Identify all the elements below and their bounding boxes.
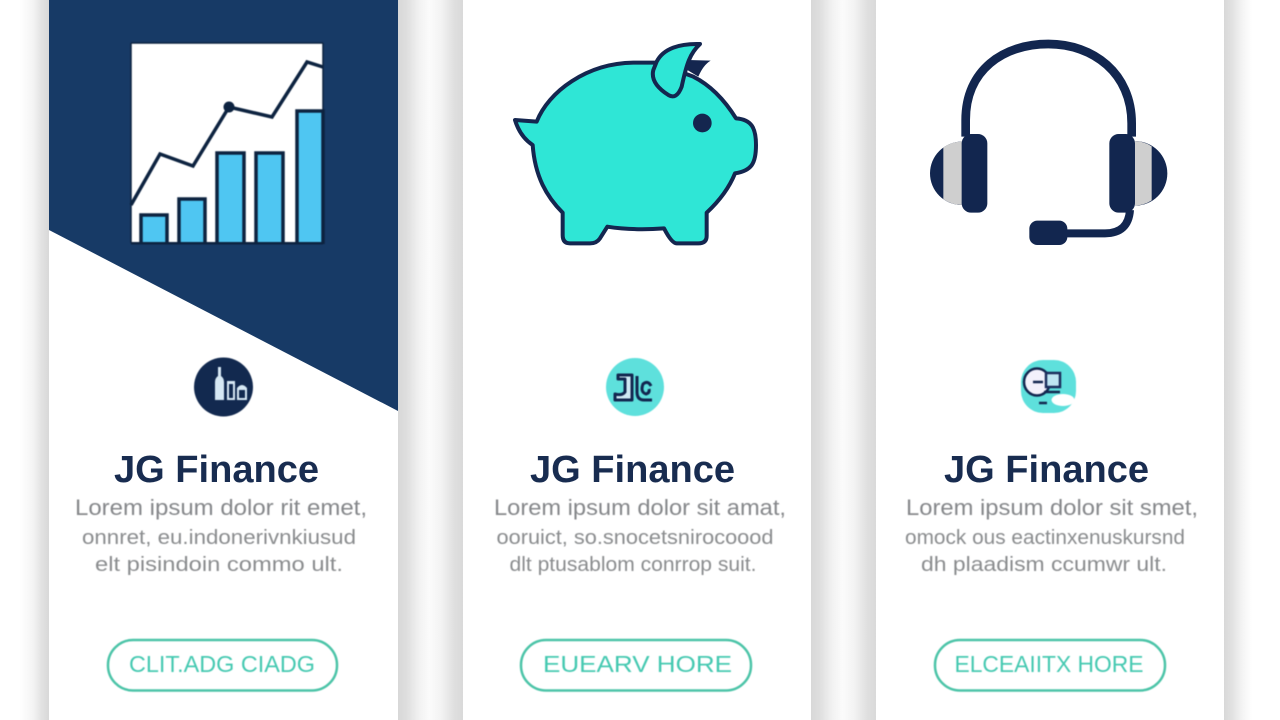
icon: piggy bank: [515, 44, 756, 243]
button: card 1: CLIT.ADG CIADG: [129, 651, 315, 677]
panel: card 3: [905, 44, 1198, 691]
description: card 2: [494, 495, 786, 576]
button: card 2: EUEARV HORE: [543, 651, 732, 677]
icon: bar and line chart: [131, 43, 323, 244]
description: card 3: dh plaadism ccumwr ult.: [921, 553, 1167, 576]
description: card 1: elt pisindoin commo ult.: [95, 553, 343, 576]
description: card 2: dlt ptusablom conrrop suit.: [510, 553, 756, 576]
icon: small teal badge: [606, 358, 664, 416]
icon: small navy chart badge: [194, 358, 253, 416]
icon: small teal headset badge: [1021, 360, 1076, 413]
description: card 1: onnret, eu.indonerivnkiusud: [82, 526, 356, 549]
description: card 3: Lorem ipsum dolor sit smet,: [906, 495, 1198, 520]
description: card 1: Lorem ipsum dolor rit emet,: [75, 495, 367, 520]
button: card 2: [521, 640, 751, 690]
description: card 2: ooruict, so.snocetsnirocoood: [496, 526, 774, 549]
heading: card 3: JG Finance: [944, 449, 1149, 491]
panel: card 1: [49, 0, 398, 690]
icon: headset: [930, 44, 1167, 245]
button: card 3: ELCEAIITX HORE: [954, 651, 1144, 677]
description: card 3: [905, 495, 1198, 576]
description: card 1: [75, 495, 367, 576]
description: card 3: omock ous eactinxenuskursnd: [905, 526, 1185, 549]
card 1 navy diagonal header: [49, 0, 398, 411]
heading: card 2: JG Finance: [530, 449, 735, 491]
description: card 2: Lorem ipsum dolor sit amat,: [494, 495, 786, 520]
button: card 1: [108, 640, 337, 690]
heading: card 1: JG Finance: [114, 449, 319, 491]
panel: card 2: [494, 44, 786, 690]
button: card 3: [935, 640, 1165, 690]
